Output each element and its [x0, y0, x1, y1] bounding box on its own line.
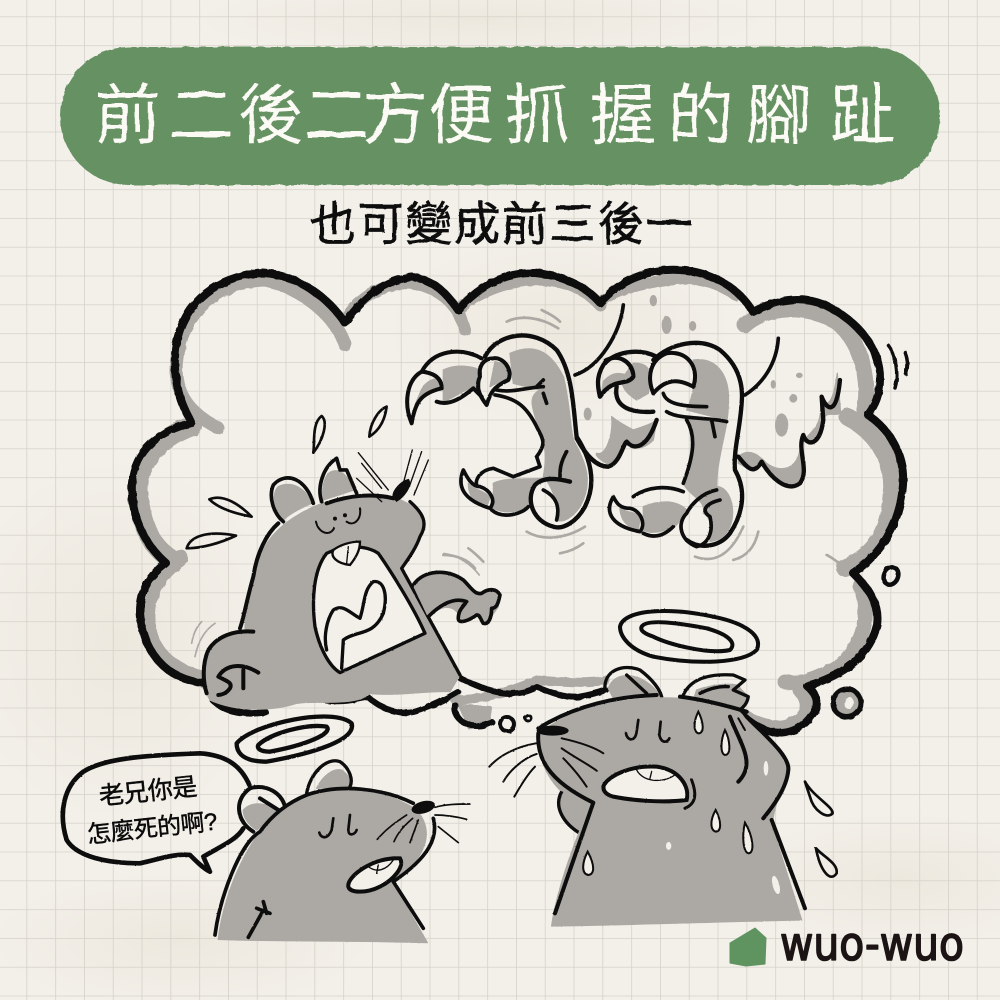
face	[316, 450, 428, 533]
wings	[575, 295, 841, 486]
face	[489, 720, 695, 808]
outline	[538, 695, 805, 913]
right claw	[598, 343, 742, 547]
body	[218, 789, 427, 943]
left claw	[407, 335, 591, 527]
line one: 老兄你是	[98, 773, 199, 811]
ears	[559, 667, 748, 833]
title banner	[60, 47, 940, 185]
claws	[407, 295, 847, 570]
haunch and foot	[204, 631, 258, 695]
sweat on body	[583, 712, 752, 875]
logo	[730, 917, 964, 971]
arm mark	[248, 902, 270, 937]
small thought bubbles	[455, 565, 901, 731]
right rat with halo	[489, 611, 837, 926]
thought cloud	[132, 270, 907, 733]
bottom left rat with halo and speech bubble	[63, 717, 470, 943]
bubble text	[86, 773, 218, 849]
screaming rat	[187, 407, 500, 709]
ears	[271, 458, 357, 522]
cloud outline	[132, 270, 903, 733]
outline	[215, 789, 435, 935]
falling drops	[805, 782, 837, 877]
speech bubble	[63, 753, 249, 872]
ears	[239, 761, 351, 832]
sweat drops	[187, 407, 387, 548]
arm	[413, 572, 500, 624]
cloud inner shadow	[138, 279, 892, 728]
halo	[237, 717, 352, 762]
motion lines around claws	[443, 310, 847, 570]
mouth	[314, 542, 425, 673]
motion lines	[192, 548, 483, 657]
title text: 前二後二方便抓握的腳趾	[95, 78, 896, 152]
icon: house	[730, 928, 766, 966]
halo	[620, 611, 758, 662]
subtitle: 也可變成前三後一	[310, 198, 692, 250]
face	[319, 798, 470, 892]
rat body	[204, 495, 460, 709]
line two: 怎麼死的啊?	[86, 808, 218, 849]
motion lines near cloud	[888, 345, 907, 388]
rat outline	[240, 523, 278, 628]
body	[538, 698, 802, 926]
brand name: wuo-wuo	[780, 917, 964, 971]
